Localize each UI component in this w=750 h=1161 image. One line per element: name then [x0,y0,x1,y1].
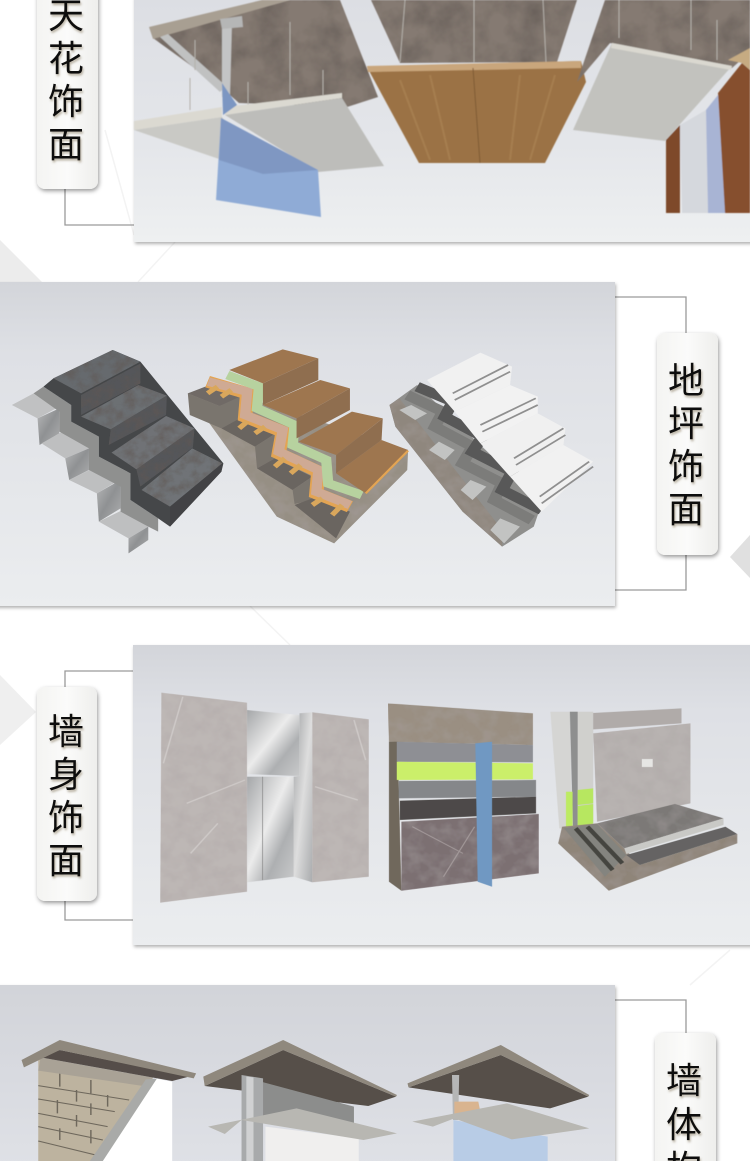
label: wall finishes: 墙 [48,711,84,752]
label: floor finishes [657,333,718,555]
illustration: marble wall with metal door [160,693,369,903]
label: ceiling finishes: 饰 [48,81,84,122]
label: wall finishes [37,687,97,901]
panel: floor finishes [0,282,615,606]
illustration: brick wall under slab [22,1040,196,1161]
illustration: wood veneer ceiling [367,0,586,163]
panel: wall finishes [133,645,750,945]
connector: floor label [615,297,686,590]
label: wall structure: 体 [666,1104,702,1145]
label: ceiling finishes: 花 [48,38,84,79]
illustration: ceiling junction with glass [408,1045,589,1161]
label: ceiling finishes: 面 [48,124,84,165]
illustration: left ceiling slab and gypsum board with glass [134,0,384,217]
illustration: dark stone stairs [12,350,223,553]
connector: wall structure label [615,1000,686,1035]
label: wall structure [655,1033,716,1161]
label: wall finishes: 饰 [48,797,84,838]
label: wall finishes: 面 [48,840,84,881]
label: floor finishes: 面 [668,489,704,530]
label: ceiling finishes [37,0,98,189]
illustration: wood stairs [188,349,408,543]
panel: wall structure [0,985,615,1161]
label: wall finishes: 身 [48,754,84,795]
illustration: layered wall section with glass [388,703,539,891]
illustration: ceiling junction with marble wall [203,1040,397,1161]
panel: ceiling finishes [134,0,750,242]
connector: wall finish label [65,671,133,920]
label: floor finishes: 坪 [668,403,704,444]
illustration: right ceiling with curtain [573,0,750,213]
connector: ceiling label [65,188,134,225]
label: floor finishes: 饰 [668,446,704,487]
label: wall structure: 墙 [666,1060,702,1101]
illustration: white marble stairs [389,353,593,547]
illustration: wall and floor corner section [550,708,737,891]
label: floor finishes: 地 [668,360,704,401]
